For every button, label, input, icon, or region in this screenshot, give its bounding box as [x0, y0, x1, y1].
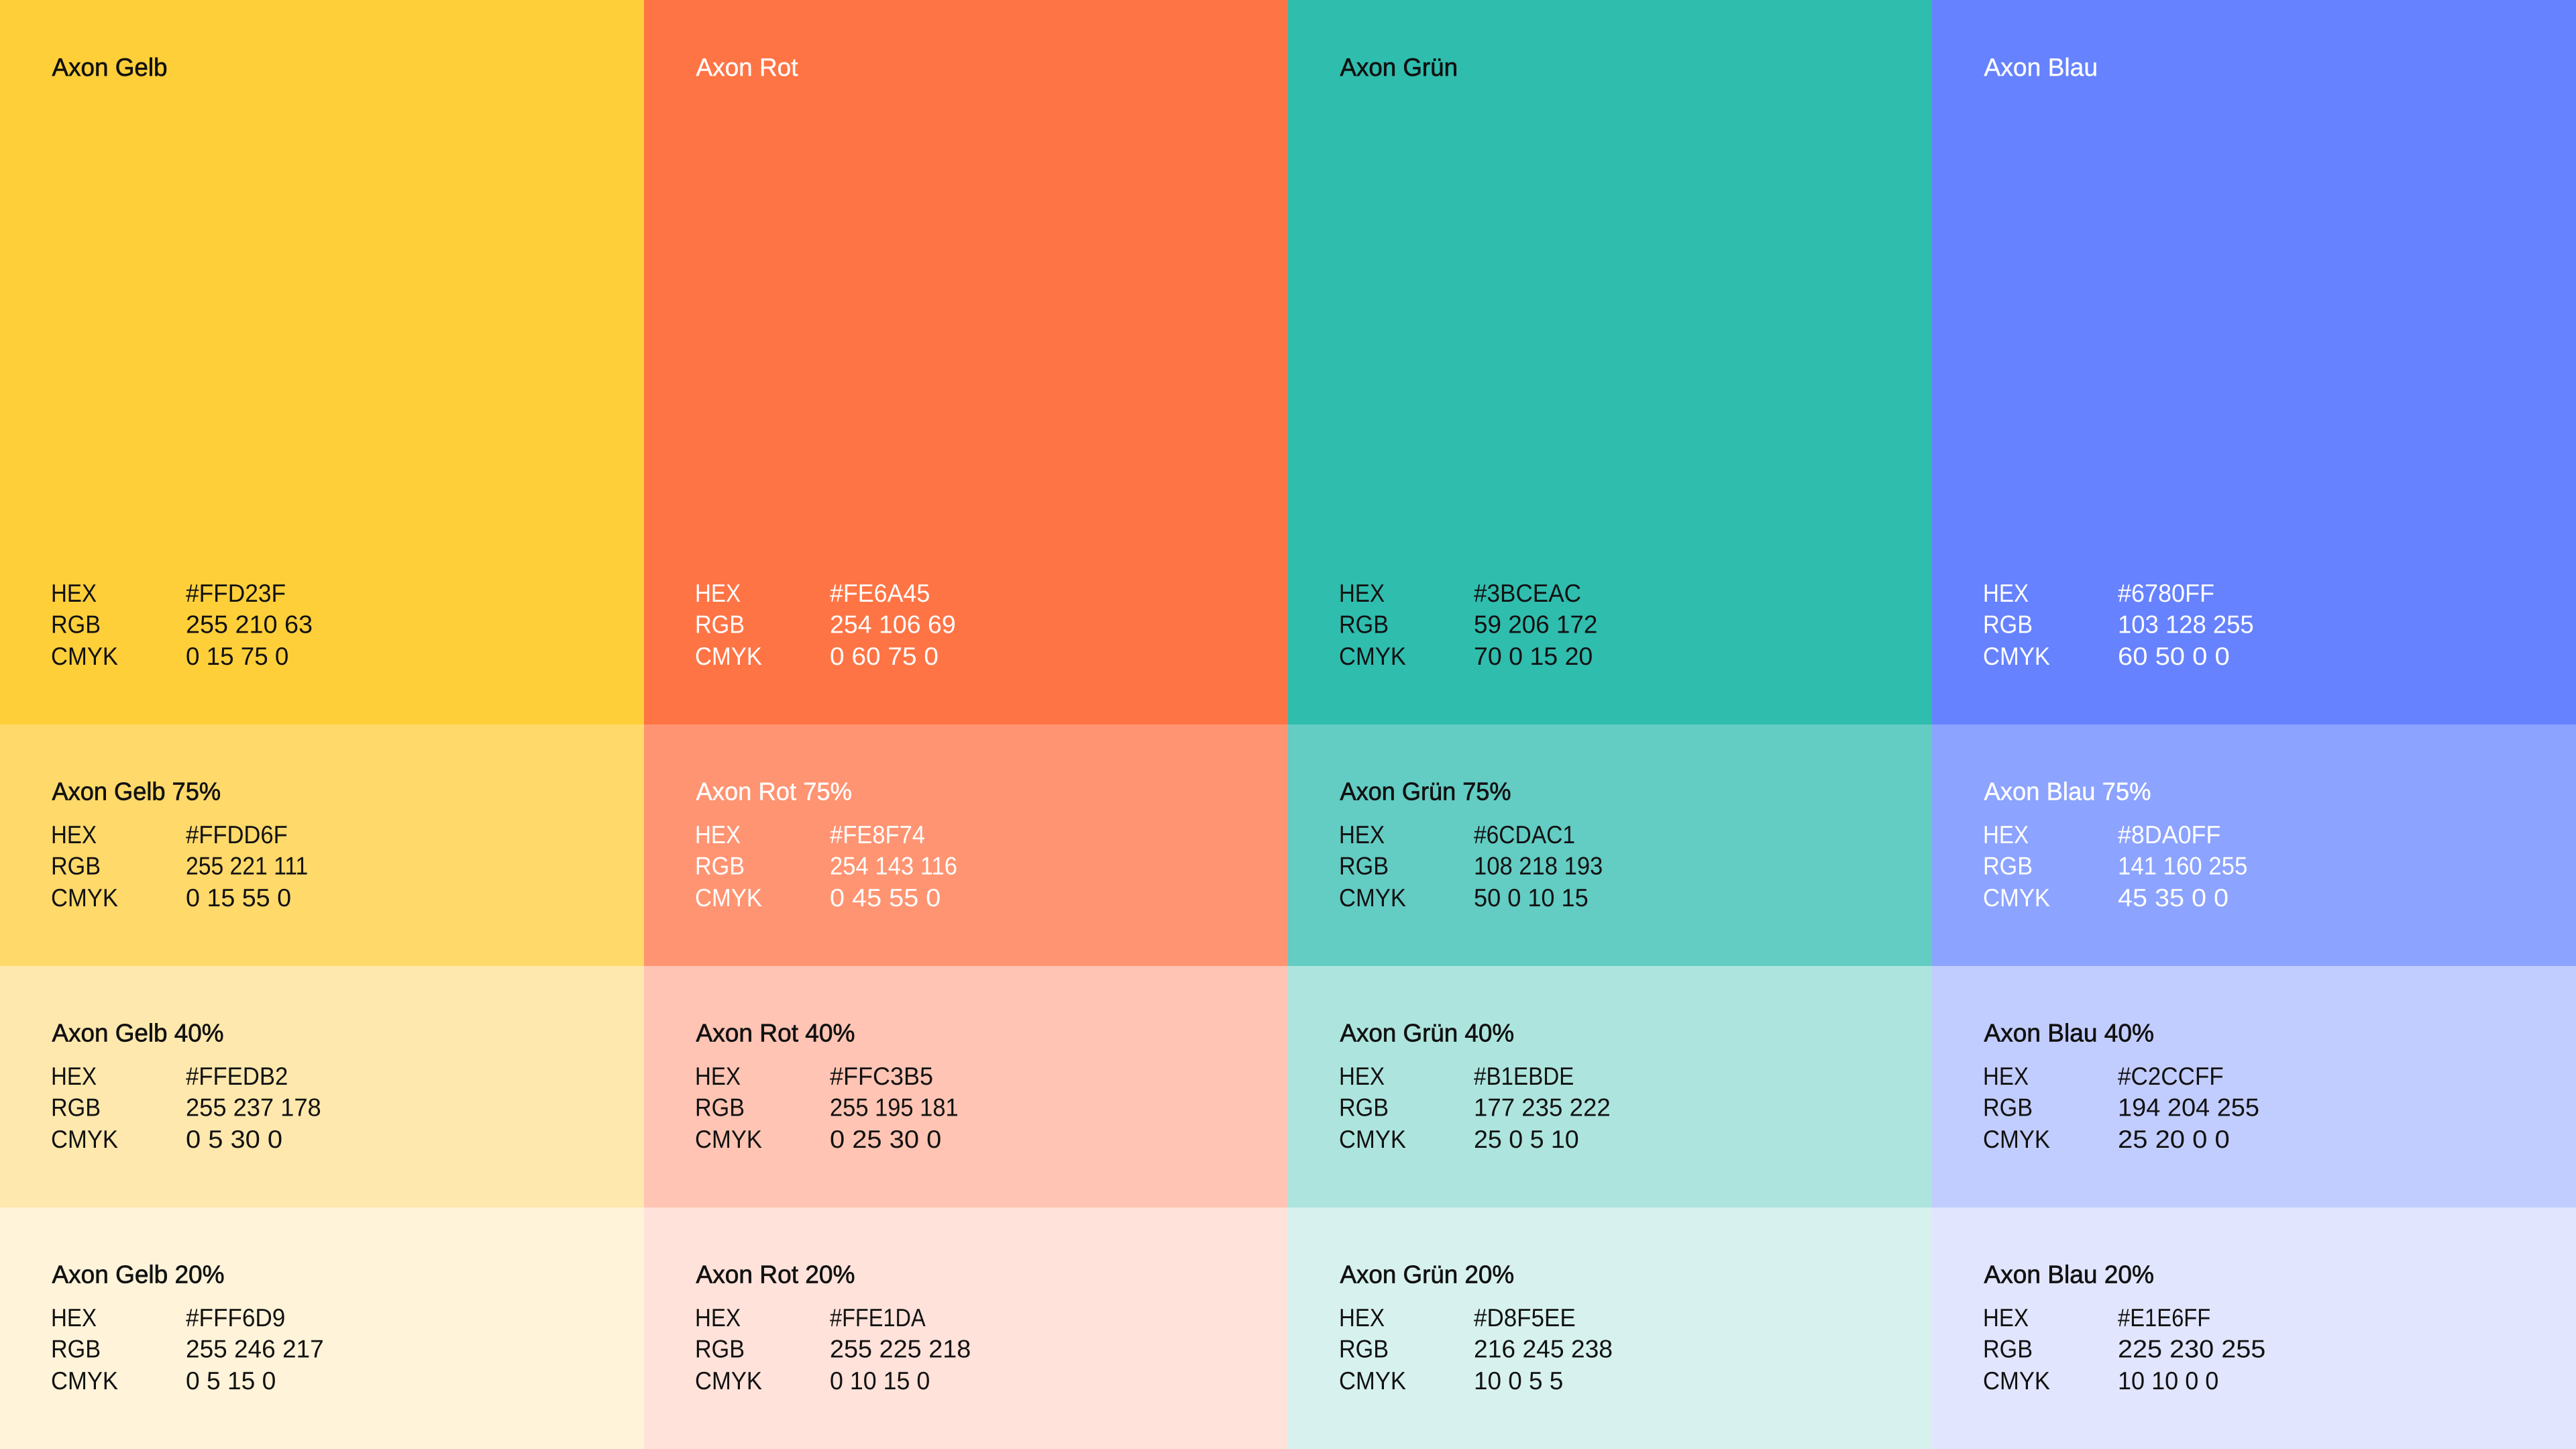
panel: Axon Blau [1932, 0, 2576, 724]
heading: Axon Grün: Axon Grün [1340, 53, 1458, 81]
colour codes: Axon Grün 20%: RGB [1339, 1335, 1389, 1363]
colour codes: Axon Grün 40%: #B1EBDE [1474, 1062, 1574, 1090]
colour codes: Axon Gelb 75%: RGB [51, 852, 101, 880]
colour codes: Axon Grün 40%: HEX [1339, 1062, 1385, 1090]
colour codes: Axon Gelb 40%: HEX [51, 1062, 97, 1090]
colour codes: Axon Blau 75% [1983, 820, 2247, 912]
colour codes: Axon Blau 75%: HEX [1983, 820, 2029, 849]
colour codes: Axon Blau 20%: HEX [1983, 1303, 2029, 1332]
colour codes: Axon Rot: 254 106 69 [830, 610, 956, 639]
colour codes: Axon Blau: CMYK [1983, 642, 2050, 670]
colour codes: Axon Blau 75%: RGB [1983, 852, 2033, 880]
panel: Axon Gelb 40% [0, 966, 644, 1208]
colour codes: Axon Gelb 75% [51, 820, 308, 912]
colour codes: Axon Gelb: CMYK [51, 642, 118, 670]
colour codes: Axon Grün: #3BCEAC [1474, 579, 1581, 607]
colour codes: Axon Blau: HEX [1983, 579, 2029, 607]
colour codes: Axon Blau 20%: 225 230 255 [2118, 1335, 2265, 1363]
colour codes: Axon Gelb 20% [51, 1303, 324, 1395]
colour codes: Axon Blau 40%: 194 204 255 [2118, 1093, 2259, 1122]
colour codes: Axon Grün 20%: 216 245 238 [1474, 1335, 1613, 1363]
colour codes: Axon Grün [1339, 579, 1597, 670]
panel: Axon Rot 40% [644, 966, 1288, 1208]
colour codes: Axon Grün 40%: 177 235 222 [1474, 1093, 1611, 1122]
colour codes: Axon Grün 40%: CMYK [1339, 1125, 1406, 1153]
colour codes: Axon Rot 20%: CMYK [695, 1366, 762, 1395]
colour codes: Axon Rot: RGB [695, 610, 745, 639]
colour codes: Axon Gelb 75%: 0 15 55 0 [186, 883, 291, 912]
colour codes: Axon Gelb: HEX [51, 579, 97, 607]
colour codes: Axon Gelb: 255 210 63 [186, 610, 313, 639]
colour codes: Axon Grün: CMYK [1339, 642, 1406, 670]
heading: Axon Rot 20%: Axon Rot 20% [696, 1260, 855, 1288]
panel: Axon Blau 20% [1932, 1208, 2576, 1449]
colour codes: Axon Rot 75%: 0 45 55 0 [830, 883, 941, 912]
colour codes: Axon Blau 75%: 45 35 0 0 [2118, 883, 2229, 912]
colour codes: Axon Rot 20%: #FFE1DA [830, 1303, 926, 1332]
colour codes: Axon Blau: 60 50 0 0 [2118, 642, 2230, 670]
heading: Axon Grün 75%: Axon Grün 75% [1340, 777, 1511, 805]
heading: Axon Blau 20%: Axon Blau 20% [1984, 1260, 2154, 1288]
colour codes: Axon Gelb 20%: RGB [51, 1335, 101, 1363]
colour codes: Axon Blau 40% [1983, 1062, 2259, 1153]
colour codes: Axon Gelb: 0 15 75 0 [186, 642, 288, 670]
colour codes: Axon Grün: HEX [1339, 579, 1385, 607]
colour codes: Axon Gelb: #FFD23F [186, 579, 286, 607]
colour codes: Axon Blau 40%: RGB [1983, 1093, 2033, 1122]
colour codes: Axon Grün 75%: HEX [1339, 820, 1385, 849]
colour codes: Axon Blau: 103 128 255 [2118, 610, 2254, 639]
colour codes: Axon Grün 75%: RGB [1339, 852, 1389, 880]
colour codes: Axon Blau 20%: #E1E6FF [2118, 1303, 2210, 1332]
colour codes: Axon Gelb 75%: #FFDD6F [186, 820, 288, 849]
colour codes: Axon Gelb 40%: 0 5 30 0 [186, 1125, 282, 1153]
colour codes: Axon Rot: #FE6A45 [830, 579, 930, 607]
heading: Axon Rot: Axon Rot [696, 53, 798, 81]
colour codes: Axon Gelb 20%: 255 246 217 [186, 1335, 324, 1363]
heading: Axon Gelb 20%: Axon Gelb 20% [52, 1260, 224, 1288]
colour codes: Axon Rot 40%: 255 195 181 [830, 1093, 959, 1122]
colour codes: Axon Blau 20%: CMYK [1983, 1366, 2050, 1395]
colour codes: Axon Gelb 75%: HEX [51, 820, 97, 849]
panel: Axon Blau 75% [1932, 724, 2576, 966]
colour codes: Axon Gelb 40%: RGB [51, 1093, 101, 1122]
colour codes: Axon Gelb 40%: 255 237 178 [186, 1093, 321, 1122]
colour codes: Axon Blau 40%: 25 20 0 0 [2118, 1125, 2230, 1153]
colour codes: Axon Gelb 20%: CMYK [51, 1366, 118, 1395]
colour codes: Axon Grün 40% [1339, 1062, 1611, 1153]
colour codes: Axon Gelb 40%: CMYK [51, 1125, 118, 1153]
colour codes: Axon Rot 40% [695, 1062, 959, 1153]
colour codes: Axon Rot 75%: HEX [695, 820, 741, 849]
colour codes: Axon Grün 20%: 10 0 5 5 [1474, 1366, 1563, 1395]
colour codes: Axon Rot 40%: #FFC3B5 [830, 1062, 933, 1090]
colour codes: Axon Rot: HEX [695, 579, 741, 607]
colour codes: Axon Blau: RGB [1983, 610, 2033, 639]
colour codes: Axon Grün 75%: #6CDAC1 [1474, 820, 1575, 849]
colour codes: Axon Rot 75%: 254 143 116 [830, 852, 957, 880]
colour codes: Axon Blau 40%: #C2CCFF [2118, 1062, 2224, 1090]
colour codes: Axon Rot [695, 579, 956, 670]
colour codes: Axon Rot 75%: CMYK [695, 883, 762, 912]
heading: Axon Grün 40%: Axon Grün 40% [1340, 1018, 1514, 1046]
colour codes: Axon Rot 40%: 0 25 30 0 [830, 1125, 941, 1153]
colour codes: Axon Rot 75%: RGB [695, 852, 745, 880]
heading: Axon Blau 75%: Axon Blau 75% [1984, 777, 2151, 805]
heading: Axon Gelb 75%: Axon Gelb 75% [52, 777, 221, 805]
colour codes: Axon Blau 40%: CMYK [1983, 1125, 2050, 1153]
colour codes: Axon Gelb 20%: HEX [51, 1303, 97, 1332]
colour codes: Axon Grün: 70 0 15 20 [1474, 642, 1593, 670]
panel: Axon Blau 40% [1932, 966, 2576, 1208]
heading: Axon Blau 40%: Axon Blau 40% [1984, 1018, 2154, 1046]
panel: Axon Gelb 20% [0, 1208, 644, 1449]
colour codes: Axon Grün 40%: RGB [1339, 1093, 1389, 1122]
colour codes: Axon Gelb 75%: 255 221 111 [186, 852, 308, 880]
colour codes: Axon Rot 20%: 0 10 15 0 [830, 1366, 930, 1395]
heading: Axon Gelb 40%: Axon Gelb 40% [52, 1018, 224, 1046]
colour codes: Axon Rot 75%: #FE8F74 [830, 820, 925, 849]
colour codes: Axon Grün 20%: #D8F5EE [1474, 1303, 1576, 1332]
colour codes: Axon Rot: 0 60 75 0 [830, 642, 938, 670]
panel: Axon Rot [644, 0, 1288, 724]
colour codes: Axon Gelb 20%: 0 5 15 0 [186, 1366, 276, 1395]
colour codes: Axon Grün 20%: CMYK [1339, 1366, 1406, 1395]
colour codes: Axon Rot 20% [695, 1303, 971, 1395]
colour codes: Axon Gelb 20%: #FFF6D9 [186, 1303, 285, 1332]
colour codes: Axon Gelb 40% [51, 1062, 321, 1153]
colour codes: Axon Rot 20%: 255 225 218 [830, 1335, 971, 1363]
colour codes: Axon Grün 20% [1339, 1303, 1613, 1395]
colour codes: Axon Grün 75%: 108 218 193 [1474, 852, 1603, 880]
panel: Axon Gelb [0, 0, 644, 724]
colour codes: Axon Gelb: RGB [51, 610, 101, 639]
colour codes: Axon Blau [1983, 579, 2254, 670]
panel: Axon Gelb 75% [0, 724, 644, 966]
colour codes: Axon Grün: 59 206 172 [1474, 610, 1597, 639]
colour codes: Axon Grün 40%: 25 0 5 10 [1474, 1125, 1579, 1153]
colour codes: Axon Blau 20%: RGB [1983, 1335, 2033, 1363]
colour codes: Axon Blau 75%: CMYK [1983, 883, 2050, 912]
panel: Axon Grün [1288, 0, 1932, 724]
colour codes: Axon Rot 40%: HEX [695, 1062, 741, 1090]
colour codes: Axon Grün 75%: CMYK [1339, 883, 1406, 912]
colour codes: Axon Blau 40%: HEX [1983, 1062, 2029, 1090]
colour codes: Axon Rot 20%: RGB [695, 1335, 745, 1363]
heading: Axon Blau: Axon Blau [1984, 53, 2098, 81]
heading: Axon Gelb: Axon Gelb [52, 53, 168, 81]
colour codes: Axon Rot 20%: HEX [695, 1303, 741, 1332]
heading: Axon Rot 75%: Axon Rot 75% [696, 777, 852, 805]
heading: Axon Grün 20%: Axon Grün 20% [1340, 1260, 1514, 1288]
colour codes: Axon Gelb 75%: CMYK [51, 883, 118, 912]
colour codes: Axon Blau: #6780FF [2118, 579, 2214, 607]
colour codes: Axon Grün: RGB [1339, 610, 1389, 639]
colour codes: Axon Grün 20%: HEX [1339, 1303, 1385, 1332]
colour codes: Axon Blau 75%: 141 160 255 [2118, 852, 2247, 880]
colour codes: Axon Gelb [51, 579, 313, 670]
colour codes: Axon Blau 20%: 10 10 0 0 [2118, 1366, 2218, 1395]
panel: Axon Rot 20% [644, 1208, 1288, 1449]
panel: Axon Grün 20% [1288, 1208, 1932, 1449]
colour codes: Axon Rot 40%: CMYK [695, 1125, 762, 1153]
colour codes: Axon Gelb 40%: #FFEDB2 [186, 1062, 288, 1090]
colour codes: Axon Grün 75%: 50 0 10 15 [1474, 883, 1589, 912]
colour codes: Axon Rot: CMYK [695, 642, 762, 670]
colour codes: Axon Grün 75% [1339, 820, 1603, 912]
colour codes: Axon Rot 40%: RGB [695, 1093, 745, 1122]
heading: Axon Rot 40%: Axon Rot 40% [696, 1018, 855, 1046]
panel: Axon Grün 75% [1288, 724, 1932, 966]
panel: Axon Rot 75% [644, 724, 1288, 966]
colour codes: Axon Blau 20% [1983, 1303, 2265, 1395]
colour codes: Axon Blau 75%: #8DA0FF [2118, 820, 2220, 849]
panel: Axon Grün 40% [1288, 966, 1932, 1208]
colour codes: Axon Rot 75% [695, 820, 957, 912]
